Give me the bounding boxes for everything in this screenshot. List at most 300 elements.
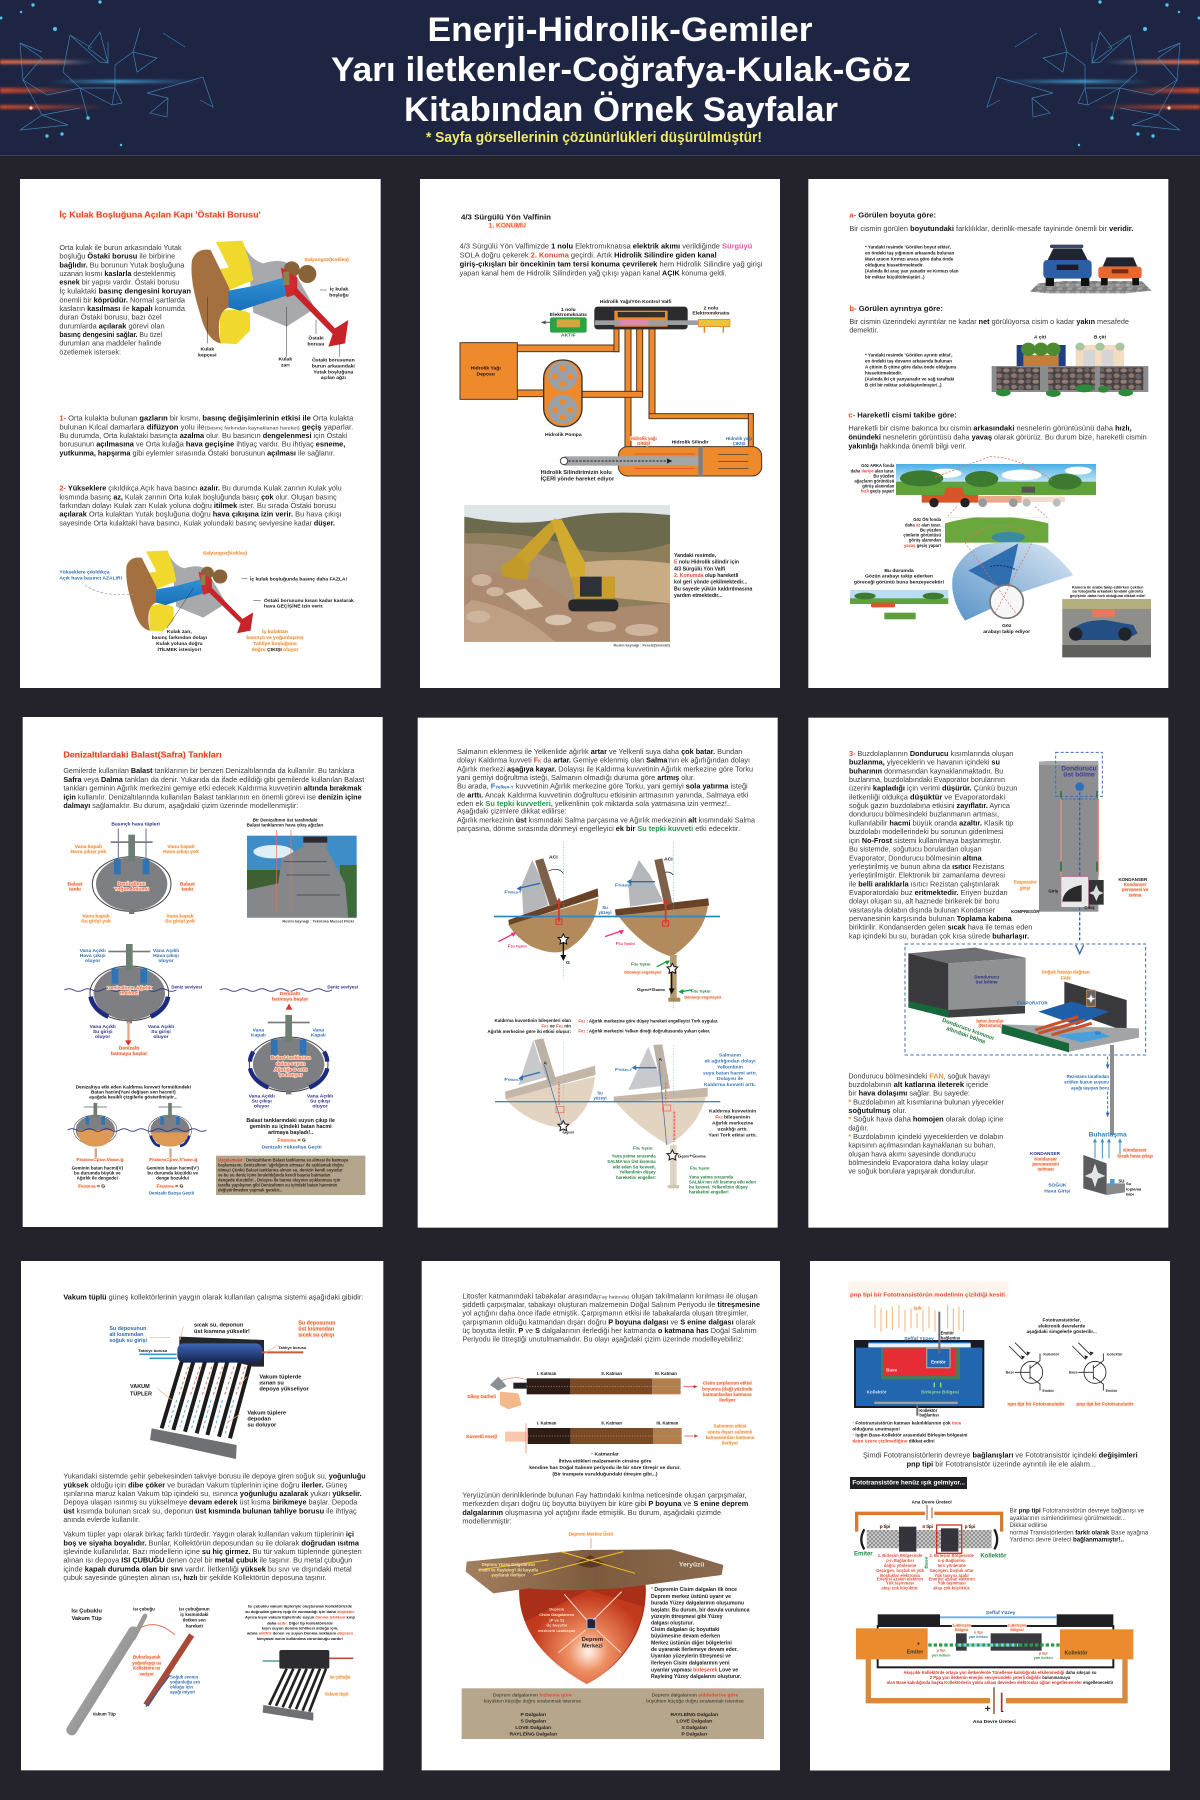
page sheet <box>418 718 778 1228</box>
text block: body wave note: Uyarılan yüzeylerin titreşmesi ve <box>651 1654 731 1660</box>
text block: no-frost: buharının donmasından kaynaklanmaktadır. Bu <box>849 767 1003 775</box>
illustration: fences on stone wall: B çiti <box>1094 334 1107 340</box>
diagram: layers with hammer: sonra dışarı salınımlı <box>708 1429 752 1434</box>
section label <box>850 1477 967 1489</box>
diagram: heat pipe tube: veriyor <box>139 1671 154 1676</box>
diagram: circuit schematic: Boşluklar elektronla <box>880 1573 921 1578</box>
section c: önündeki nesnelerin görüntüsü daha yavaş olarak görürüz. Bu durum bize, hareketli cismin <box>848 433 1147 441</box>
text block: force components: FK1 : Ağırlık merkezini Yelken direği doğrultusunda yukarı çeker. <box>578 1028 710 1033</box>
diagram: evaporator compartment: üst bölme <box>976 980 998 985</box>
text block: fan <box>848 1072 1005 1176</box>
text block: no-frost: pervanesinin karşısında bulunan Toplama kabına <box>849 915 1013 923</box>
text block: item 1: Bu durumda, Orta kulaktaki basınçta azalma olur. Bu basıncın dengelenmesi için Östaki <box>59 432 348 440</box>
diagram: boat forces upper: Dönmeyi engelleyici <box>684 995 721 999</box>
text block: notes: * Fototransistörün katman kalınlıklarının çok ince <box>852 1421 962 1426</box>
text block: intro: durumları ana maddeler halinde <box>59 340 162 348</box>
title: Yarı iletkenler-Coğrafya-Kulak-Göz <box>331 51 911 89</box>
diagram: ear under pressure: İTİLMEK isteniyor! <box>157 646 202 653</box>
diagram: phototransistor section: Emitör <box>941 1331 954 1336</box>
text block: intro: de arttı. Ancak Kaldırma kuvvetinin doğrultucu etkisinin artmasının yanında, Salmaya etki <box>457 791 749 799</box>
diagram: submarine cross-section: Balast <box>68 881 83 887</box>
text block: no-frost: yerleştirilmiştir. Elektronik bir zamanlama devresi <box>849 872 1005 880</box>
diagram: small collector: Vakum tüpü <box>325 1692 349 1697</box>
diagram: junction charge carriers: Kollektör <box>1064 1650 1088 1656</box>
diagram: boat forces lower: Dolayısı ile <box>717 1076 743 1082</box>
diagram: layers with hammer: ilerliyor <box>722 1441 738 1446</box>
diagram: boat forces upper: FSu Tepkisi <box>508 943 527 948</box>
illustration: motion parallax: ağaçların görüntüsü <box>854 478 895 483</box>
diagram: phototransistor section: Birleşme Bölgesi <box>921 1389 959 1394</box>
diagram: ear anatomy: açılan ağzı <box>321 375 347 381</box>
diagram: junction charge carriers: 1. Birleşim <box>952 1624 972 1628</box>
photo: racing car: Kamera ile araba takip edilirken çekilen <box>1072 585 1144 589</box>
diagram: refrigerator: pervanesi ve <box>1122 887 1149 892</box>
diagram: ear anatomy <box>191 241 355 381</box>
diagram: solar collector: VAKUM <box>130 1384 150 1390</box>
text block: force components: Ağırlık merkezine göre iki etkisi oluşur: <box>487 1029 571 1034</box>
diagram: layers with hammer: I. Katman <box>537 1371 557 1376</box>
text block: fan: * Soğuk hava daha homojen olarak dolap içine <box>848 1116 1003 1124</box>
diagram: submarine cross-section: tankı <box>69 886 81 892</box>
diagram: submarine cross-section: Vana kapalı <box>75 844 103 850</box>
diagram: ear under pressure: doğru ÇIKIŞI oluyor <box>252 647 298 653</box>
diagram: boat forces upper: ACI <box>549 854 558 860</box>
diagram: junction charge carriers: Akışçılık Kollektörde ortaya yarı iletkenlerde Tünelleme kalınlığında etkilenmediği daha sıkışan su <box>904 1670 1097 1675</box>
diagram: evaporator compartment: altındaki bölme <box>945 1026 986 1046</box>
diagram: heat pipe tube: olduğu için <box>170 1685 193 1690</box>
control valve: Elektromıknatıs <box>692 311 730 317</box>
diagram: hydraulic circuit <box>460 299 762 482</box>
page sheet <box>23 717 383 1227</box>
diagram: submarine cross-section: Balast <box>180 881 195 887</box>
hydraulic cylinder: Hidrolik Silindir <box>672 440 708 446</box>
diagram: boat forces lower: Salmanın <box>719 1053 741 1059</box>
diagram: submarine cross-section: Yoğun bölümü <box>114 886 149 892</box>
text block: waves: modellenmiştir: <box>462 1518 512 1526</box>
table: wave ranking: Deprem dalgalarının hızlarına göre <box>493 1693 572 1699</box>
diagram: solar collector: soğuk su girişi <box>109 1338 147 1344</box>
diagram: submarine rising: Balast tanklarına <box>271 1055 311 1061</box>
diagram: circuit schematic: ters yönlenme <box>938 1563 966 1568</box>
table: wave ranking: S Dalgaları <box>520 1719 547 1725</box>
diagram: phototransistor symbols <box>1006 1318 1134 1406</box>
diagram: displaced volume comparison: FKaldırma = G <box>157 1184 184 1190</box>
callout: warning box: başlamasını, Denizaltının 'ağırlığının artması' ile açıklamak doğru <box>218 1163 344 1168</box>
diagram: submarine rising: ve batıyor <box>279 1072 302 1078</box>
text block: no-frost: kap içindeki bu su, buradan çok kısa sürede buharlaşır. <box>849 932 1029 940</box>
text block: tube types <box>63 1531 362 1582</box>
section b: A çitinin B çitine göre daha önde olduğunu <box>865 365 957 370</box>
diagram: circuit schematic: akışı çok küçüktür. <box>933 1585 970 1590</box>
diagram: ear under pressure: İç kulaktan <box>262 628 288 635</box>
photo: racing car: bu fotoğrafta arkadaki fondaki görüntü <box>1072 590 1144 594</box>
text block: item 2: kısmında basınç az, Kulak zarının Orta kulak boşluğunda basıç çok olur. Oluşan basınç <box>59 493 337 501</box>
diagram: small collector <box>263 1650 353 1721</box>
text block: notes: olduğunu unutmayın! <box>852 1427 900 1432</box>
text block: no-frost: soğuk gazın buzdolabına etkisini zayıflatır. Ayrıca <box>849 802 1010 810</box>
diagram: submarine sinking: oluyor <box>95 1034 110 1040</box>
diagram: boat forces lower: Yani Tork etkisi arttı. <box>708 1133 757 1139</box>
diagram: submarine sinking: Su girişi <box>151 1029 171 1035</box>
section c: c- Hareketli cismi takibe göre: <box>848 411 957 420</box>
text block: operation: anında evlerde kullanılır. <box>63 1516 140 1524</box>
diagram: drain pipe and condenser <box>1030 1045 1153 1197</box>
caption text: kol geri yönde çekilmektedir... <box>674 580 748 586</box>
diagram: boat forces upper <box>494 842 721 1008</box>
diagram: heat pipe tube: yoğunluğu artı <box>170 1680 200 1685</box>
text block: item 2: sayesinde Orta kulaktaki hava basıncı, Kulak yolundaki basınç seviyesine kadar düşer. <box>59 519 335 527</box>
diagram: displaced volume comparison: denge bozuldu! <box>156 1175 190 1180</box>
text block: intro: önemli bir köprüdür. Normal şartlarda <box>59 296 185 304</box>
diagram: submarine sinking: Vana Açıklı <box>80 948 106 954</box>
text block: no-frost: Evaporator, Dondurucu bölmesinin altına <box>849 854 983 862</box>
network glow right <box>987 0 1200 146</box>
illustration: fences on stone wall <box>992 334 1148 397</box>
panel: page 9 phototransistor <box>810 1261 1170 1770</box>
diagram: submarine rising: oluyor <box>254 1104 269 1110</box>
text block: tube types: Vakum tüpler yapı olarak birkaç farklı türdedir. Yaygın olarak kullanılan vakum tüplerinin içi <box>63 1531 354 1539</box>
text block: intro: kasların kasılması ile kapalı konumda <box>59 305 185 313</box>
diagram: circuit schematic: akışı çok küçüktür. <box>881 1585 919 1590</box>
diagram: solar collector <box>109 1320 335 1459</box>
diagram: drain pipe and condenser: toplama <box>1126 1186 1142 1191</box>
text block: force components: FK2 : Ağırlık merkezine göre düşey hareketi engelleyici Tork uygular. <box>578 1018 718 1023</box>
diagram: phototransistor section: Kollektör <box>867 1389 887 1394</box>
text block: no-frost: vasıtasıyla dolabın dışında bulunan Kondanser <box>849 906 996 914</box>
diagram: junction charge carriers: - <box>1001 1706 1004 1715</box>
diagram: heat pipe tube: yoğunlaşıp ısı <box>132 1660 161 1665</box>
photo: excavator <box>464 505 671 648</box>
diagram: boat forces lower: Yana yatma sırasında <box>612 1154 656 1159</box>
text block: waves <box>462 1491 748 1526</box>
diagram: boat forces lower: Kaldırma kuvveti arttı. <box>704 1082 757 1088</box>
diagram: junction charge carriers: + <box>917 1642 920 1648</box>
illustration: fences on stone wall: A çiti <box>1034 335 1047 341</box>
text block: intro: Safra veya Dalma tankları da denir. Yukarıda da ifade edildiği gibi gemilerde kullanılan Balast <box>63 776 364 784</box>
text block: body wave note: * Depremin Cisim dalgaları ilk önce <box>651 1587 737 1593</box>
diagram: phototransistor section: Kollektör <box>919 1408 938 1413</box>
diagram: drain pipe and condenser: SOĞUK <box>1048 1180 1067 1188</box>
table: wave ranking: Deprem dalgalarının şiddetlerine göre <box>652 1693 739 1699</box>
text block: item 2 <box>59 485 342 527</box>
caption text: yardım etmektedir... <box>674 593 723 599</box>
diagram: earthquake sphere: Deprem <box>582 1637 603 1643</box>
diagram: boat forces lower: suya batan hacmi arttı. <box>703 1070 758 1076</box>
diagram: junction charge carriers: yarı iletken <box>1034 1656 1053 1660</box>
diagram: circuit schematic: Base <box>924 1556 930 1569</box>
table: wave ranking: P Dalgaları <box>520 1712 547 1718</box>
diagram: layers with hammer: boyunca (dağ) yüzünde <box>702 1386 753 1391</box>
text block: no-frost <box>849 750 1032 940</box>
text block: body wave note: de uyararak ilerlemeye devam eder. <box>651 1647 738 1653</box>
text block: body wave note: Rayleing Yüzey dalgalarını oluşturur. <box>651 1674 742 1680</box>
diagram: drain pipe and condenser: Kondanser <box>1034 1156 1057 1161</box>
diagram: junction charge carriers: n tipi <box>974 1630 983 1634</box>
diagram: ear under pressure: İç kulak boşluğunda basınç daha FAZLA! <box>250 575 348 582</box>
text block: fan: * Buzdolabının içindeki yiyeceklerden ve dolabın <box>848 1133 1003 1141</box>
text block: intro <box>63 767 364 810</box>
diagram: submarine sinking: Su girişi <box>93 1029 113 1035</box>
diagram: solar collector: Su deposunun <box>298 1320 335 1326</box>
text block: pnp note: Bir pnp tipi Fototransistörün devreye bağlanışı ve <box>1010 1508 1144 1515</box>
diagram: solar collector: Vakum tüplere <box>247 1411 286 1417</box>
diagram: earthquake sphere: Üç boyutta <box>546 1623 568 1628</box>
diagram: earthquake sphere: merkezin uzaklaşan <box>538 1628 576 1633</box>
text block: force components: FK1 ve FK2 nin <box>541 1023 571 1028</box>
callout: warning box: ve bu su deniz içine bırakıldığında kendi başına batmadan <box>218 1173 331 1178</box>
diagram: boat forces lower: FSu Tepkisi <box>690 1166 710 1172</box>
diagram: ear anatomy: borusu <box>308 341 324 347</box>
diagram: ear anatomy: Salyangoz(Koklea) <box>304 257 349 263</box>
section label: Fototransistöre henüz ışık gelmiyor... <box>852 1481 965 1487</box>
control valve: 2 nolu <box>704 305 718 311</box>
text block: intro: için kullanılır. Denizaltılarında kullanılan Balast tanklarının en önemli görevi ise denizin içine <box>63 793 362 801</box>
control valve: Elektromıknatıs <box>550 312 587 318</box>
diagram: refrigerator: Kondanser <box>1124 882 1147 887</box>
diagram: junction charge carriers <box>856 1610 1133 1725</box>
text block: intro: Orta kulak ile burun arkasındaki Yutak <box>59 244 182 252</box>
illustration: motion parallax: Bu yüzden <box>873 473 895 478</box>
diagram: phototransistor symbols: Base <box>1069 1370 1078 1374</box>
text block: fan: oluşan hava akımı sayesinde dondurucu <box>848 1150 976 1158</box>
text block: intro: 4/3 Sürgülü Yön Valfimizde 1 nolu Elektromıknatısa elektrik akımı verildiğinde Sürgüyü <box>460 242 752 250</box>
caption text: Bu sayede yükün kaldırılmasına <box>674 586 752 592</box>
diagram: ear under pressure: hava GEÇİŞİNE izin verir. <box>264 603 324 610</box>
diagram: layers with hammer: Dikey Darbeli <box>467 1394 496 1399</box>
diagram: boat forces lower: A <box>543 1060 547 1066</box>
diagram: heat pipe tube: Soğuk sıvının <box>170 1674 198 1679</box>
diagram: earthquake sphere: Merkezi <box>582 1643 603 1649</box>
diagram: phototransistor symbols: npn tipi bir Fototransistör <box>1008 1401 1065 1406</box>
text block: fan: bölmesindeki Evaporatora daha kolay ulaşır <box>848 1159 989 1167</box>
text block: item 1: borusunun açılmasına ve Orta kulağa hava geçişine ihtiyaç vardır. Bu ihtiyaç esneme, <box>59 441 345 449</box>
illustration: motion parallax: Bu yüzden <box>920 528 941 533</box>
diagram: solar collector: alt kısmından <box>109 1332 143 1338</box>
diagram: submarine rising: oluyor <box>312 1104 328 1110</box>
diagram: boat forces lower: Ggemi+Gsalma <box>678 1154 706 1160</box>
diagram: drain pipe and condenser: Hava Girişi <box>1044 1188 1071 1194</box>
text block: operation: Yukarıdaki sistemde şehir şebekesinden takviye borusu ile depoya giren soğuk su, yoğunluğu <box>63 1473 366 1481</box>
diagram: evaporator compartment: SU <box>1095 1030 1101 1035</box>
text block: body wave note <box>651 1587 750 1680</box>
diagram: refrigerator: Çıkış <box>1084 905 1095 910</box>
text block: layers note: İhtiva ettikleri malzemenin cinsine göre <box>559 1457 652 1464</box>
diagram: submarine sinking: Hava çıkışı <box>153 953 179 959</box>
diagram: heat pipe tube <box>71 1606 210 1730</box>
text block: intro: yapan kanal hem de Hidrolik Silindirden yağ çıkışı yapan kanal AÇIK konuma geldi. <box>460 269 727 277</box>
text block: intro: Litosfer katmanındaki tabakalar arasında (Fay hattında) oluşan takılmaların kırılması ile oluşan <box>462 1292 758 1300</box>
diagram: heat pipe tube: hareketi <box>186 1623 203 1628</box>
diagram: circuit schematic: Yük taşıyıcı azalır <box>934 1573 969 1578</box>
diagram: submarine rising: geminin su içindeki batan hacmi <box>250 1124 332 1130</box>
text block: body wave note: yüzeyin titreşmesi gibi Yüzey <box>651 1614 723 1620</box>
text block: body wave note: uyarılar yapması birleşerek Love ve <box>651 1667 738 1673</box>
text block: intro: Ağırlık merkezi aşağıya kayar. Dolayısı ile Kaldırma kuvvetinin Ağırlık merkezine göre Torku <box>457 765 753 773</box>
diagram: boat forces lower: Yelkenlinin <box>717 1064 743 1070</box>
text block: intro: bağlıdır. Bu borunun Yutak boşluğuna <box>59 261 184 269</box>
text block: body wave note: burada Yüzey dalgalarının oluşumunu <box>651 1601 744 1607</box>
diagram: boat forces lower: Yelkenlinin düşey <box>619 1170 656 1175</box>
photo: submarine tower: Bir Denizaltının üst tarafındaki <box>253 817 317 822</box>
illustration: motion parallax: daha ileriye alan tarar. <box>851 468 894 473</box>
text block: no-frost: ile belli aralıklarla ısıtıcı Rezistan çalıştırılarak <box>849 880 1000 888</box>
diagram: submarine rising: Denizaltı <box>280 991 301 997</box>
text block: body wave note: Cisim dalgaları üç boyuttaki <box>651 1627 720 1633</box>
diagram: displaced volume comparison: FKaldırma=ρsıvı.Vbatan.g <box>77 1157 123 1163</box>
diagram: drain pipe and condenser: KONDANSER <box>1030 1151 1061 1156</box>
diagram: submarine rising: Kapalı <box>251 1032 266 1038</box>
text block: heat pipe note: kimyasal ısının kullanılma zorunluluğu vardır! <box>257 1636 343 1641</box>
diagram: submarine sinking: oluyor <box>85 958 100 964</box>
diagram: drain pipe and condenser: Rezistans tarafından <box>1067 1074 1109 1079</box>
diagram: junction charge carriers: Ana Devre Üreteci <box>973 1718 1016 1725</box>
text block: waves: Yeryüzünün derinliklerinde bulunan Fay hattındaki kırılma neticesinde oluşan çarpışmalar, <box>462 1491 747 1499</box>
diagram: displaced volume comparison: FKaldırma = G <box>78 1184 105 1190</box>
diagram: solar collector: sıcak su, deponun <box>194 1323 244 1329</box>
text block: no-frost: için No-Frost sistemi kullanılmaya başlanmıştır. <box>849 837 1002 845</box>
diagram: submarine sinking: Deniz seviyesi <box>171 984 202 989</box>
diagram: submarine cross-section: Hava çıkışı yok <box>163 849 199 855</box>
hydraulic cylinder <box>541 436 762 482</box>
diagram: junction charge carriers: Bölgesi <box>955 1628 968 1632</box>
diagram: layers with hammer: III. Katman <box>656 1421 679 1426</box>
diagram: submarine rising: Vana Açıklı <box>307 1093 334 1099</box>
diagram: submarine cross-section: Vana kapalı <box>82 913 110 919</box>
diagram: solar collector: depoya yükseliyor <box>259 1387 309 1393</box>
page sheet <box>20 179 381 688</box>
text block: operation: yüksek olduğu için dibe çöker ve buradan Vakum tüplerinin içine doğru ilerler. Güneş <box>63 1481 348 1489</box>
text block: heat pipe note: kışın suyun donma tehlikesi olduğu için, <box>262 1625 338 1630</box>
diagram: heat pipe tube: Isı çubuğunun <box>179 1606 210 1611</box>
text block: no-frost: yerleştirilmiş ve bunun altına da ısıtıcı Rezistans <box>849 863 1005 871</box>
text block: intro: uzanan kısmı kaslarla desteklenmiş <box>59 270 176 278</box>
section a: * Yandaki resimde 'Görülen boyut etkisi', <box>865 244 951 249</box>
panel: page 1 ear <box>20 179 381 688</box>
caption text: E nolu Hidrolik silindir için <box>674 560 739 566</box>
text block: intro: çarpışmanın olduğu katmandan dışarı doğru P boyuna dalgası ve S enine dalgası olarak <box>462 1318 756 1326</box>
diagram: boat forces lower: Kaldırma kuvvetinin <box>709 1109 756 1115</box>
diagram: submarine cross-section: tankı <box>182 886 194 892</box>
diagram: boat forces upper: Su <box>602 905 608 910</box>
diagram: solar collector: Vakum tüplerde <box>259 1375 301 1381</box>
text block: waves: merkezden dışarı doğru üç boyutta büyüyen bir küre gibi P boyuna ve S enine deprem <box>462 1500 748 1508</box>
diagram: phototransistor symbols: Kollektör <box>1043 1353 1060 1357</box>
diagram: ear under pressure: Tahliye boşluğuna <box>253 641 297 647</box>
diagram: boat forces upper: G <box>566 960 570 966</box>
text block: lead: Vakum tüplü güneş kollektörlerinin yaygın olarak kullanılan çalışma sistemi aşağıdaki gibidir: <box>63 1293 363 1301</box>
illustration: motion parallax: görüş alanından <box>909 538 941 543</box>
diagram: submarine sinking: Vana Açıklı <box>153 948 180 954</box>
diagram: drain pipe and condenser: Kondanser <box>1123 1148 1147 1153</box>
section c: yakınlığı hakkında önemli bilgi verir. <box>848 442 967 450</box>
hydraulic cylinder: ÇIKIŞI <box>733 441 745 446</box>
callout: warning box: dengede durabilir!.. Dolayısı ile batma olayının açıklanması için <box>218 1178 341 1183</box>
diagram: ear anatomy: Yutak boşluğuna <box>313 369 353 375</box>
diagram: displaced volume comparison <box>68 1085 206 1196</box>
text block: body wave note: başlatır. Bu durum, bir davula vurulunca <box>651 1607 750 1613</box>
illustration: motion parallax: hızlı geçiş yapar! <box>861 489 894 494</box>
diagram: heat pipe tube: Kollektöre ısı <box>133 1666 160 1671</box>
text block: intro: dolayı Kaldırma kuvveti FK da artar. Gemiye eklenmiş olan Salma'nın ek ağırlığından dolayı <box>457 757 750 765</box>
text block: body wave note: ilerleyen Cisim dalgalarının yeni <box>651 1660 730 1666</box>
text block: intro: tankları geminin Ağırlık merkezini gemiye etki edecek Kaldırma kuvvetinin altında bırakmak <box>63 785 362 793</box>
diagram: solar collector: ısınan su <box>259 1381 284 1387</box>
diagram: junction charge carriers: p tipi <box>1039 1652 1048 1656</box>
text block: intro: duran Östaki borusu, bazı özel <box>59 314 162 322</box>
diagram: boat forces upper: Dönmeyi engelleyici <box>624 970 661 974</box>
diagram: layers with hammer: Cisim zarplarının etkisi <box>703 1380 752 1385</box>
text block: body wave note: büyümesine devam ederken <box>651 1634 720 1640</box>
diagram: drain pipe and condenser: ısıtması <box>1038 1167 1054 1172</box>
diagram: phototransistor symbols: pnp tipi bir Fototransistör <box>1077 1401 1134 1406</box>
diagram: heat pipe tube: Vakum Tüp <box>72 1616 102 1622</box>
title <box>331 11 911 129</box>
illustration: motion parallax: görüş alanından <box>862 483 895 488</box>
text block: tube types: içinde kapalı durumda olan bir sıvı vardır. İletkenliği yüksek bu sıvı ve dışındaki metal <box>63 1564 352 1573</box>
text block: layers note: * Katmanlar <box>591 1452 619 1458</box>
diagram: solar collector: TÜPLER <box>130 1390 152 1397</box>
diagram: drain pipe and condenser: Sıcak hava çıkışı <box>1117 1154 1153 1159</box>
diagram: drain pipe and condenser: eritilen buzun suyunu <box>1064 1080 1109 1085</box>
diagram: submarine rising <box>220 984 358 1151</box>
callout: warning box: değiştirilmeden yapmak gerekir... <box>218 1188 282 1193</box>
oil tank: Deposu <box>477 372 495 378</box>
text block: intro: SOLA doğru çekerek 2. Konuma geçirdi. Artık Hidrolik Silindire giden kanal <box>460 251 717 259</box>
diagram: boat forces lower: uzaklığı arttı. <box>717 1127 749 1133</box>
diagram: drain pipe and condenser: SU <box>1118 1178 1124 1183</box>
diagram: solar collector: su doluyor <box>247 1423 277 1429</box>
text block: intro <box>457 748 755 833</box>
section a: (Aslında iki araç yan yanadır ve Kırmızı olan <box>865 268 959 273</box>
control valve: 1 nolu <box>561 307 576 313</box>
text block: item 2: 2- Yükseklere çıkıldıkça Açık hava basıncı azalır. Bu durumda Kulak zarının Kulak yolu <box>59 485 342 493</box>
section b: * Yandaki resimde 'Görülen ayrıntı etkisi', <box>865 353 953 358</box>
text block: intro: durumlarda açılarak görevi olan <box>59 322 165 330</box>
diagram: evaporator compartment: EVAPORATOR <box>1017 1000 1048 1005</box>
diagram: solar collector: Takviye borusu <box>138 1348 168 1353</box>
diagram: junction charge carriers: 2 Ppp yarı iletkenin enerjisi seviyesindeki yeterli değildir bulunmamaya <box>930 1675 1071 1680</box>
diagram: submarine cross-section: Hava çıkışı yok <box>70 849 106 855</box>
illustration: motion parallax: göreceği görüntü buna benzeyecektir! <box>854 580 944 586</box>
diagram: circuit schematic: p tipi <box>880 1524 890 1529</box>
diagram: boat forces lower: FSu Tepkisi <box>633 1146 653 1152</box>
text block: fan: bir hava dolaşımı sağlar. Bu sayede: <box>848 1090 970 1098</box>
diagram: displaced volume comparison: Ağırlık ile dengede! <box>77 1175 119 1180</box>
illustration: motion parallax: Göz ARKA fonda <box>861 463 895 468</box>
panel: page 6 refrigerator <box>808 718 1168 1228</box>
text block: fan: Dondurucu bölmesindeki FAN, soğuk havayı <box>848 1072 990 1080</box>
diagram: ear anatomy: zarı <box>281 362 290 368</box>
diagram: circuit schematic: Emiter <box>854 1552 873 1558</box>
diagram: phototransistor section: bağlantısı <box>919 1413 939 1418</box>
page sheet <box>808 718 1168 1228</box>
diagram: earthquake sphere <box>466 1531 723 1684</box>
page sheet <box>808 179 1168 688</box>
illustration: cars on stones <box>1030 245 1152 293</box>
text block: heat pipe note: daha azdır. Diğer tip Kollektörlerde <box>267 1620 334 1625</box>
diagram: ear anatomy: burun arkasındaki <box>312 364 355 370</box>
table: wave ranking: P Dalgaları <box>681 1732 708 1738</box>
heading: Denizaltılardaki Balast(Safra) Tankları <box>63 751 222 760</box>
diagram: heat pipe tube: aşağı iniyor! <box>170 1690 196 1695</box>
diagram: drain pipe and condenser: Su <box>1126 1181 1132 1186</box>
text block: no-frost: biriktirilir. Kondanserden gelen sıcak hava ile temas eden <box>849 924 1032 932</box>
text block: item 1: bulunan Kılcal damarlara difüzyon yolu ile(Basınç farkından kaynaklanan hareket) geçiş yaparlar. <box>59 423 353 431</box>
text block: item 1: 1- Orta kulakta bulunan gazların bir kısmı, basınç değişimlerinin etkisi ile Orta kulakta <box>59 415 353 423</box>
diagram: junction charge carriers: p tipi <box>937 1649 945 1653</box>
diagram: circuit schematic: n-p Bağlantısı <box>938 1558 965 1563</box>
diagram: submarine rising: dolan suyun <box>276 1061 305 1067</box>
